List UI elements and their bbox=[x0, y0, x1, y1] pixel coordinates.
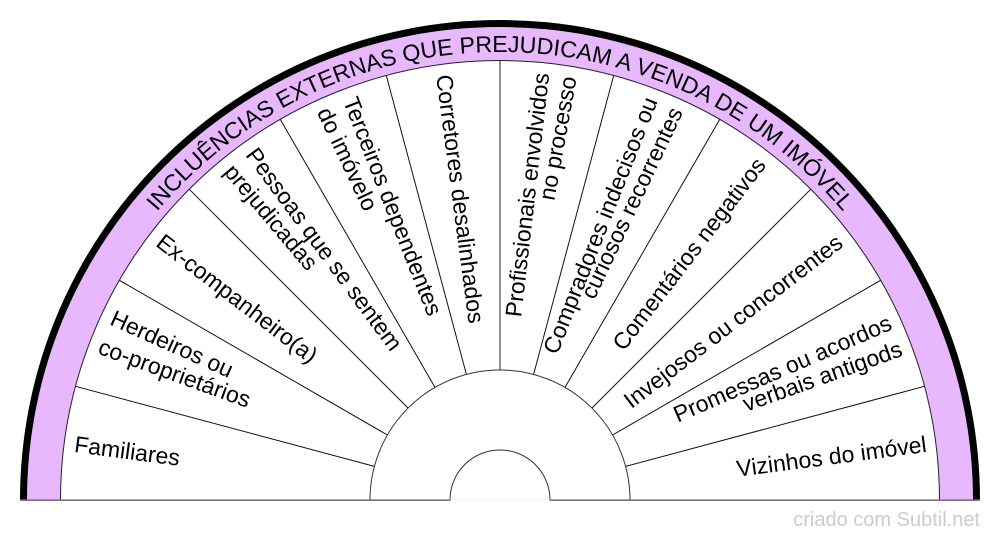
watermark: criado com Subtil.net bbox=[793, 509, 980, 531]
label: Profissionais envolvidos no processo: no processo bbox=[534, 74, 582, 202]
label: Compradores indecisos ou curiosos recorrentes: Compradores indecisos ou bbox=[538, 93, 663, 357]
label: Invejosos ou concorrentes: Invejosos ou concorrentes bbox=[619, 229, 847, 413]
label: Comentários negativos: Comentários negativos bbox=[607, 153, 771, 355]
label: Familiares: Familiares bbox=[73, 431, 182, 471]
label: Compradores indecisos ou curiosos recorrentes: curiosos recorrentes bbox=[575, 103, 688, 303]
label: Profissionais envolvidos no processo: Profissionais envolvidos bbox=[500, 71, 554, 318]
inner cut-out bbox=[450, 450, 550, 500]
title: INCLUÊNCIAS EXTERNAS QUE PREJUDICAM A VENDA DE UM IMÓVEL bbox=[146, 36, 850, 212]
label: Pessoas que se sentem prejudicadas: Pessoas que se sentem bbox=[241, 143, 408, 355]
white sector area bbox=[60, 61, 940, 500]
baseline bbox=[20, 499, 980, 501]
label: Pessoas que se sentem prejudicadas: prejudicadas bbox=[219, 159, 323, 275]
label: Profissionais envolvidos no processo bbox=[500, 71, 582, 318]
label: Ex-companheiro(a): Ex-companheiro(a) bbox=[152, 229, 323, 368]
label: Terceiros dependentes do imóvelo: do imóvelo bbox=[312, 103, 383, 215]
label: Herdeiros ou co-proprietários: co-proprietários bbox=[95, 334, 254, 413]
label: Promessas ou acordos verbais antigods: Promessas ou acordos bbox=[669, 310, 895, 427]
label: Corretores desalinhados: Corretores desalinhados bbox=[431, 73, 490, 325]
label: Vizinhos do imóvel: Vizinhos do imóvel bbox=[735, 431, 928, 482]
label: Promessas ou acordos verbais antigods: verbais antigods bbox=[739, 336, 906, 417]
inner hub bbox=[370, 370, 630, 500]
label: Herdeiros ou co-proprietários: Herdeiros ou bbox=[107, 305, 237, 383]
label: Terceiros dependentes do imóvelo: Terceiros dependentes bbox=[338, 93, 448, 319]
